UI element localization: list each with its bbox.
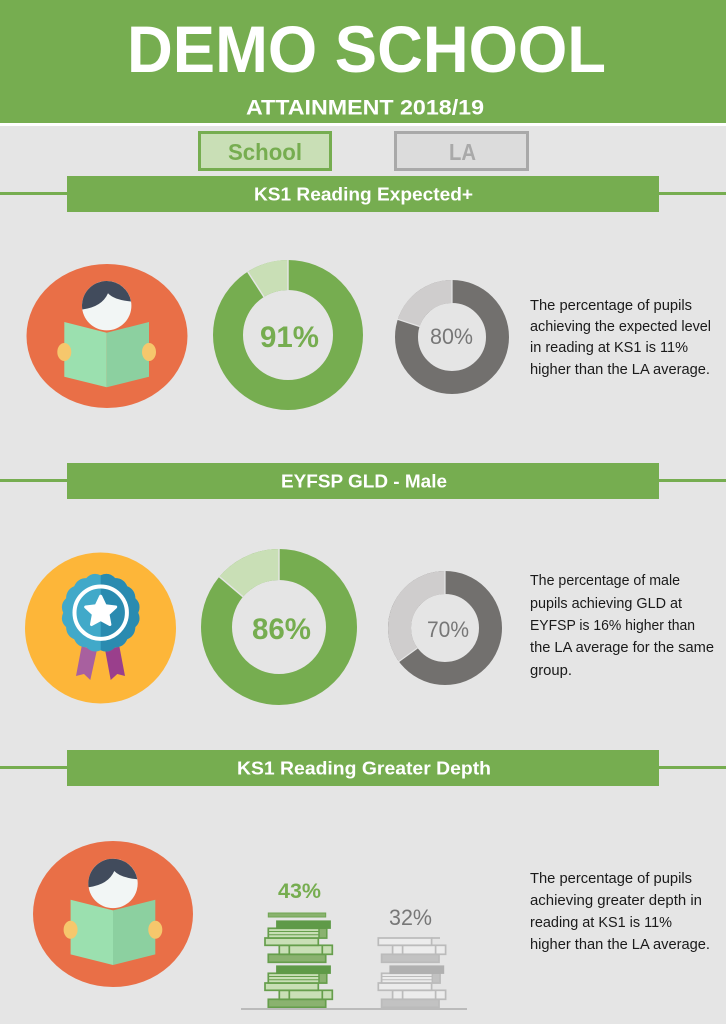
- subtitle: ATTAINMENT 2018/19: [246, 96, 484, 120]
- text: EYFSP GLD male summary: EYFSP is 16% higher than: [530, 618, 695, 634]
- shelf line: [241, 1008, 467, 1010]
- icon: award rosette: [25, 552, 176, 704]
- legend: School: [200, 132, 330, 170]
- text: EYFSP GLD male summary: [530, 573, 714, 679]
- book stack: LA 32%: [378, 905, 446, 1007]
- legend: LA: [396, 132, 528, 170]
- donut: school 86%: 86%: [252, 613, 311, 646]
- text: KS1 reading greater depth summary: [530, 871, 710, 953]
- book stack: school 43%: 43%: [278, 880, 321, 903]
- donut: LA 70%: 70%: [427, 617, 469, 642]
- legend: LA: LA: [449, 139, 476, 165]
- book stack: school 43%: [265, 880, 332, 1007]
- text: KS1 reading greater depth summary: The percentage of pupils: [530, 871, 692, 887]
- text: KS1 reading expected summary: [530, 298, 711, 378]
- section heading: KS1 Reading Expected+: [0, 176, 726, 212]
- icon: child reading: [26, 264, 188, 408]
- text: KS1 reading expected summary: higher than the LA average.: [530, 362, 710, 378]
- header banner: [0, 0, 726, 126]
- text: KS1 reading greater depth summary: achieving greater depth in: [530, 893, 702, 909]
- section heading: KS1 Reading Greater Depth: [0, 750, 726, 786]
- text: KS1 reading expected summary: achieving the expected level: [530, 319, 711, 335]
- section heading: KS1 Reading Expected+: KS1 Reading Expected+: [254, 184, 473, 204]
- text: EYFSP GLD male summary: group.: [530, 663, 572, 679]
- donut: school 86%: [216, 549, 342, 690]
- section heading: EYFSP GLD - Male: [0, 463, 726, 499]
- text: EYFSP GLD male summary: pupils achieving GLD at: [530, 596, 682, 612]
- donut: school 91%: 91%: [260, 321, 319, 354]
- text: KS1 reading greater depth summary: higher than the LA average.: [530, 937, 710, 953]
- donut: LA 80%: 80%: [430, 324, 473, 349]
- book stack: LA 32%: 32%: [389, 905, 432, 930]
- title: DEMO SCHOOL: [127, 12, 606, 86]
- text: EYFSP GLD male summary: The percentage of male: [530, 573, 680, 589]
- donut: LA 80%: [397, 280, 498, 382]
- donut: LA 70%: [398, 570, 490, 674]
- text: KS1 reading expected summary: The percentage of pupils: [530, 298, 692, 314]
- section heading: EYFSP GLD - Male: EYFSP GLD - Male: [281, 470, 447, 492]
- text: EYFSP GLD male summary: the LA average for the same: [530, 640, 714, 656]
- icon: child reading: [33, 841, 193, 987]
- section heading: KS1 Reading Greater Depth: KS1 Reading Greater Depth: [237, 758, 491, 778]
- text: KS1 reading expected summary: in reading at KS1 is 11%: [530, 340, 688, 356]
- donut: school 91%: [228, 260, 348, 395]
- legend: School: School: [228, 139, 302, 165]
- text: KS1 reading greater depth summary: reading at KS1 is 11%: [530, 915, 672, 931]
